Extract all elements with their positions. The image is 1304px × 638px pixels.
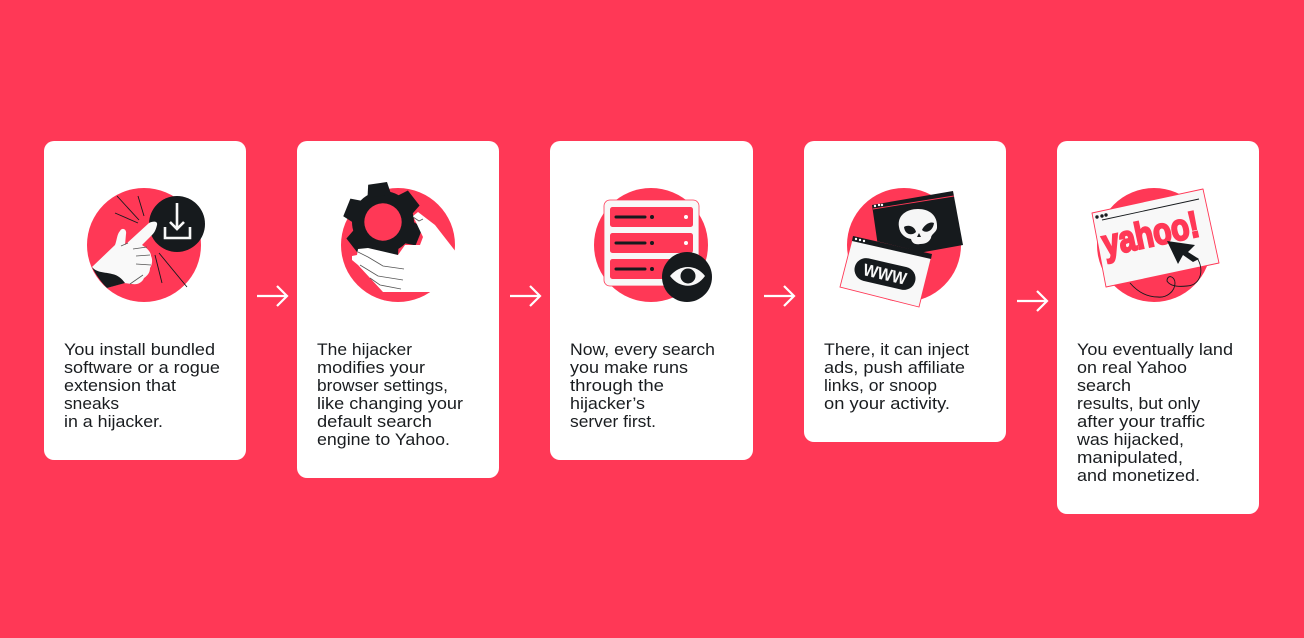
icon: hand holding gear	[341, 182, 458, 302]
text: step 5: manipulated,	[1077, 449, 1183, 467]
text: step 2: browser settings,	[317, 377, 448, 395]
panel: step 3 server	[550, 141, 753, 460]
text: step 1: extension that	[64, 377, 176, 395]
text: step 3: through the	[570, 377, 664, 395]
text: step 1	[64, 341, 220, 431]
icon: hand clicking download	[87, 188, 205, 302]
panel: step 1 install	[44, 141, 246, 460]
text: step 3: hijacker’s	[570, 395, 645, 413]
text: step 4: ads, push affiliate	[824, 359, 965, 377]
text: step 5: You eventually land	[1077, 341, 1233, 359]
arrow: step 2 to 3	[510, 286, 540, 306]
text: step 2: The hijacker	[317, 341, 413, 359]
arrow: step 4 to 5	[1017, 291, 1047, 311]
arrow: step 3 to 4	[764, 286, 794, 306]
text: step 5: and monetized.	[1077, 467, 1200, 485]
icon: yahoo browser window: yahoo!	[1098, 204, 1203, 264]
text: step 3: server first.	[570, 413, 656, 431]
text: step 5: was hijacked,	[1076, 431, 1184, 449]
text: step 3: you make runs	[570, 359, 688, 377]
text: step 2: like changing your	[317, 395, 464, 413]
icon: malicious browser windows: WWW	[861, 260, 909, 289]
panel: step 2 settings	[297, 141, 499, 478]
text: step 5: results, but only	[1077, 395, 1201, 413]
icon: server with eye	[594, 188, 712, 302]
panel: step 5 yahoo	[1057, 141, 1259, 514]
text: step 1: in a hijacker.	[64, 413, 163, 431]
arrow: step 1 to 2	[257, 286, 287, 306]
icon: yahoo browser window	[1092, 188, 1219, 302]
text: step 4: links, or snoop	[824, 377, 937, 395]
text: step 3: Now, every search	[570, 341, 715, 359]
text: step 4: on your activity.	[824, 395, 950, 413]
text: step 1: software or a rogue	[64, 359, 220, 377]
text: step 5: on real Yahoo	[1077, 359, 1187, 377]
text: step 5: after your traffic	[1077, 413, 1205, 431]
text: step 1: You install bundled	[64, 341, 215, 359]
text: step 2: modifies your	[317, 359, 426, 377]
text: step 4	[824, 341, 969, 413]
text: step 4: There, it can inject	[824, 341, 969, 359]
text: step 3	[570, 341, 715, 431]
text: step 5	[1076, 341, 1233, 485]
icon: malicious browser windows	[840, 188, 963, 307]
text: step 2: default search	[317, 413, 432, 431]
text: step 2	[317, 341, 464, 449]
text: step 2: engine to Yahoo.	[317, 431, 450, 449]
text: step 5: search	[1077, 377, 1131, 395]
panel: step 4 inject	[804, 141, 1006, 442]
text: step 1: sneaks	[64, 395, 119, 413]
